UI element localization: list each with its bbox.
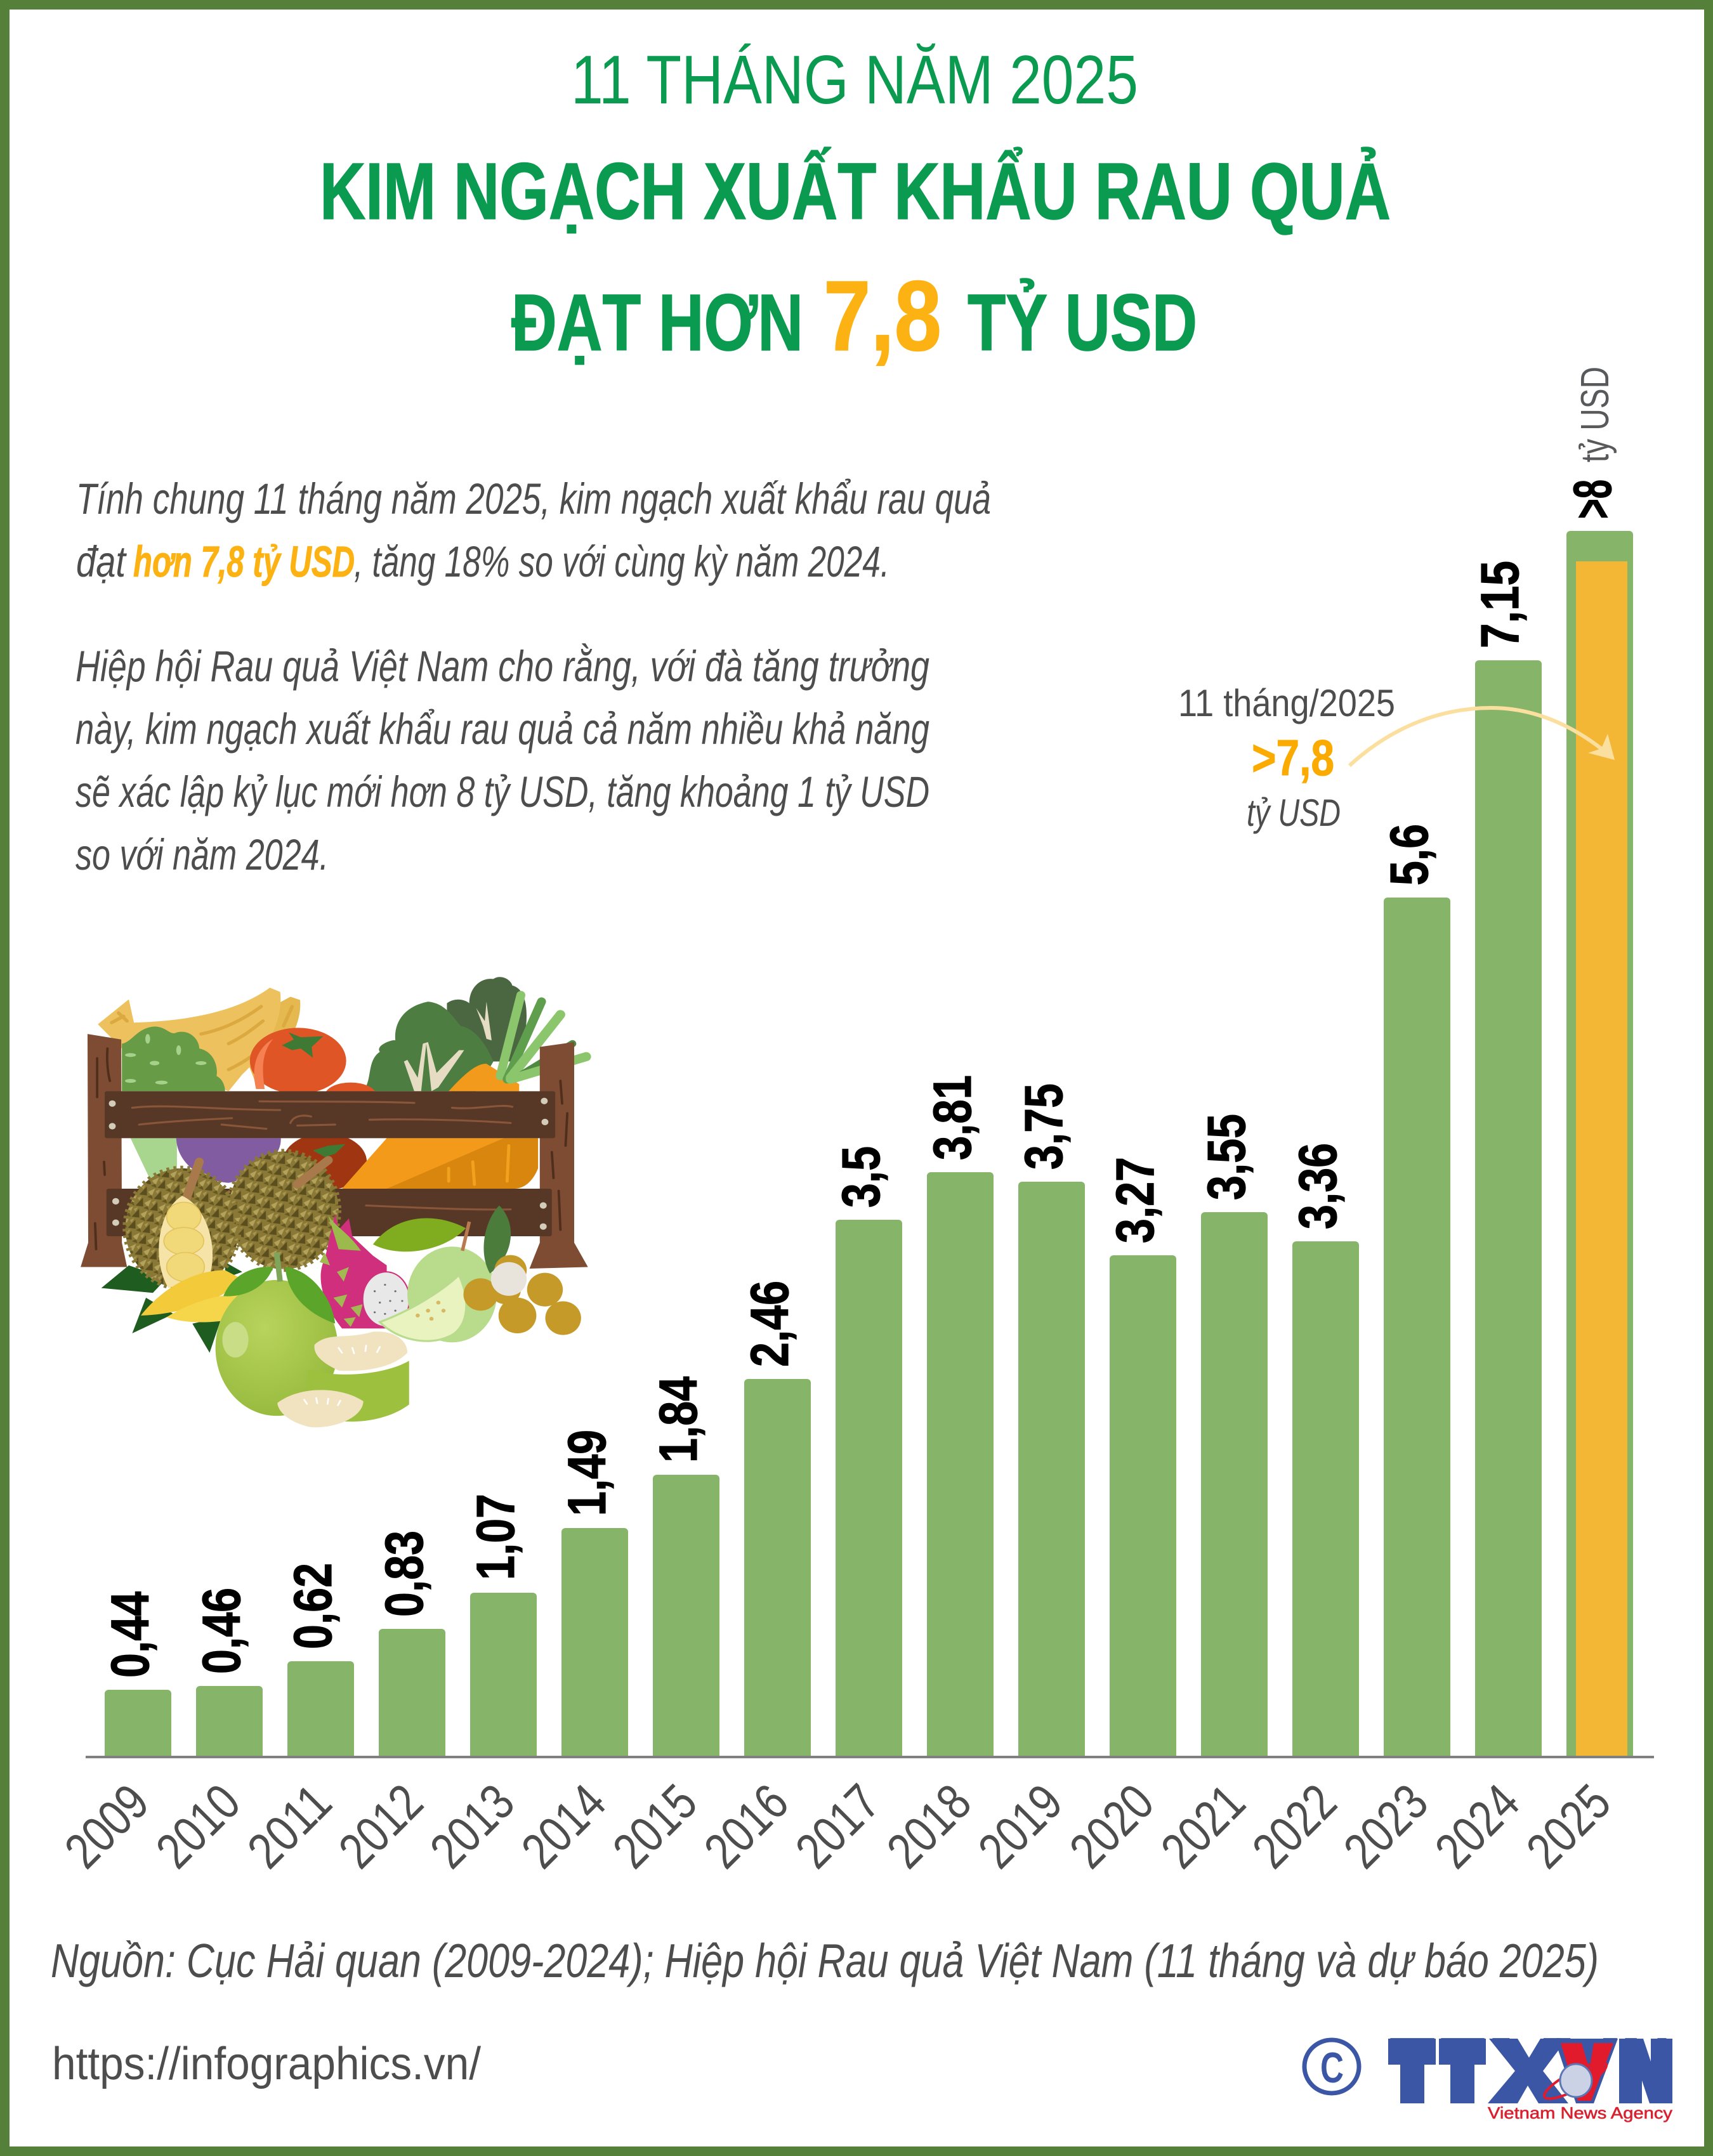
longans	[463, 1255, 581, 1335]
callout value: >7,8	[1252, 729, 1334, 786]
paragraph 2	[75, 642, 929, 879]
callout period: 11 tháng/2025	[1178, 682, 1395, 724]
website: https://infographics.vn/	[52, 2039, 481, 2089]
globe with orbit	[1540, 2056, 1610, 2105]
lettuce front	[363, 1002, 494, 1091]
wordmark backing shapes	[1388, 2039, 1672, 2103]
value labels: 5,6	[1379, 824, 1439, 885]
year labels: 2018	[876, 1774, 981, 1879]
bars	[105, 531, 1633, 1756]
value labels: >8	[1563, 480, 1622, 519]
value labels: 3,75	[1014, 1083, 1073, 1170]
agency wordmark: N	[1620, 2018, 1671, 2123]
year labels: 2012	[328, 1774, 433, 1879]
year labels: 2015	[602, 1774, 707, 1879]
year labels: 2009	[54, 1774, 159, 1879]
arrow	[1349, 708, 1615, 766]
durian left	[126, 1162, 239, 1288]
title unit: TỶ USD	[968, 278, 1197, 367]
paragraph 2: Hiệp hội Rau quả Việt Nam cho rằng, với đà tăng trưởng	[75, 642, 929, 691]
callout unit: tỷ USD	[1247, 792, 1341, 834]
year labels: 2019	[968, 1774, 1073, 1879]
longan leaf	[483, 1206, 511, 1274]
bar chart	[54, 367, 1654, 1879]
cut pomelo	[277, 1331, 409, 1427]
paragraph 2: sẽ xác lập kỷ lục mới hơn 8 tỷ USD, tăng khoảng 1 tỷ USD	[75, 768, 929, 816]
dragon fruit	[320, 1213, 409, 1328]
durian flesh	[141, 1271, 240, 1323]
year labels: 2023	[1333, 1774, 1438, 1879]
items behind the crate	[131, 1138, 177, 1181]
pomelo	[216, 1252, 338, 1416]
agency wordmark: X	[1489, 2018, 1564, 2123]
value labels: 7,15	[1470, 561, 1530, 648]
title figure: 7,8	[824, 261, 942, 372]
banana	[98, 988, 300, 1091]
year labels: 2022	[1242, 1774, 1347, 1879]
paragraph 1: đạt	[76, 537, 127, 586]
value labels: 0,62	[283, 1563, 343, 1649]
year labels: 2013	[419, 1774, 525, 1879]
paragraph 1	[76, 474, 991, 586]
crate bottom plank	[107, 1189, 552, 1236]
year labels: 2021	[1150, 1774, 1256, 1879]
value labels: 0,46	[192, 1588, 251, 1674]
year labels: 2014	[511, 1774, 616, 1879]
guava	[380, 1222, 497, 1342]
2025 eleven-month bar	[1576, 561, 1627, 1756]
agency wordmark: T	[1389, 2018, 1435, 2123]
crate top plank	[105, 1091, 555, 1138]
copyright mark: C	[1320, 2044, 1344, 2092]
value labels: 2,46	[740, 1281, 799, 1367]
year labels: 2017	[785, 1774, 890, 1879]
agency wordmark: T	[1440, 2018, 1485, 2123]
value labels: 0,44	[100, 1591, 160, 1678]
title line: reached: ĐẠT HƠN	[511, 278, 803, 367]
value labels: 1,84	[648, 1376, 708, 1463]
year labels: 2010	[145, 1774, 251, 1879]
paragraph 1: , tăng 18% so với cùng kỳ năm 2024.	[354, 537, 889, 586]
value labels: 1,49	[557, 1430, 617, 1516]
title block	[320, 41, 1391, 372]
paragraph 2: so với năm 2024.	[75, 830, 329, 879]
carrot top	[449, 1064, 519, 1091]
title line: headline: KIM NGẠCH XUẤT KHẨU RAU QUẢ	[320, 147, 1391, 236]
illustration: crate of fruit and vegetables	[81, 977, 588, 1427]
broccoli	[122, 1026, 225, 1091]
green onion	[500, 995, 586, 1080]
title line: period: 11 THÁNG NĂM 2025	[571, 41, 1138, 119]
value labels: 3,5	[831, 1146, 891, 1208]
value labels: 3,27	[1105, 1157, 1165, 1243]
year labels: 2011	[237, 1774, 342, 1879]
value labels: 3,36	[1288, 1143, 1348, 1229]
year labels: 2016	[693, 1774, 799, 1879]
value labels	[100, 367, 1622, 1678]
small tomato	[325, 1083, 376, 1108]
durian leaves	[102, 1262, 242, 1353]
axis	[86, 1756, 1654, 1758]
logo: TTXVN	[1304, 2018, 1672, 2123]
intro text block	[75, 474, 991, 879]
durian right	[228, 1151, 339, 1269]
agency wordmark: V	[1556, 2018, 1618, 2123]
paragraph 1: Tính chung 11 tháng năm 2025, kim ngạch xuất khẩu rau quả	[76, 474, 991, 523]
crate posts	[81, 1034, 127, 1267]
value labels: 3,55	[1197, 1114, 1256, 1200]
paragraph 1: hơn 7,8 tỷ USD	[133, 537, 355, 586]
tomato	[250, 1028, 346, 1094]
year labels: 2020	[1059, 1774, 1164, 1879]
value labels: 1,07	[466, 1494, 525, 1580]
year labels	[54, 1774, 1621, 1879]
value labels: 0,83	[374, 1531, 434, 1617]
copyright mark	[1304, 2040, 1359, 2093]
paragraph 2: này, kim ngạch xuất khẩu rau quả cả năm nhiều khả năng	[75, 705, 929, 754]
year labels: 2024	[1424, 1774, 1530, 1879]
dark lettuce back	[447, 977, 527, 1061]
value labels: tỷ USD	[1573, 367, 1617, 462]
agency tagline: Vietnam News Agency	[1488, 2103, 1672, 2122]
callout: 11 months 2025	[1178, 682, 1615, 834]
year labels: 2025	[1516, 1774, 1621, 1879]
value labels: 3,81	[922, 1075, 982, 1160]
agency wordmark	[1389, 2018, 1671, 2123]
red V	[1561, 2043, 1613, 2101]
guava leaf	[373, 1218, 466, 1251]
